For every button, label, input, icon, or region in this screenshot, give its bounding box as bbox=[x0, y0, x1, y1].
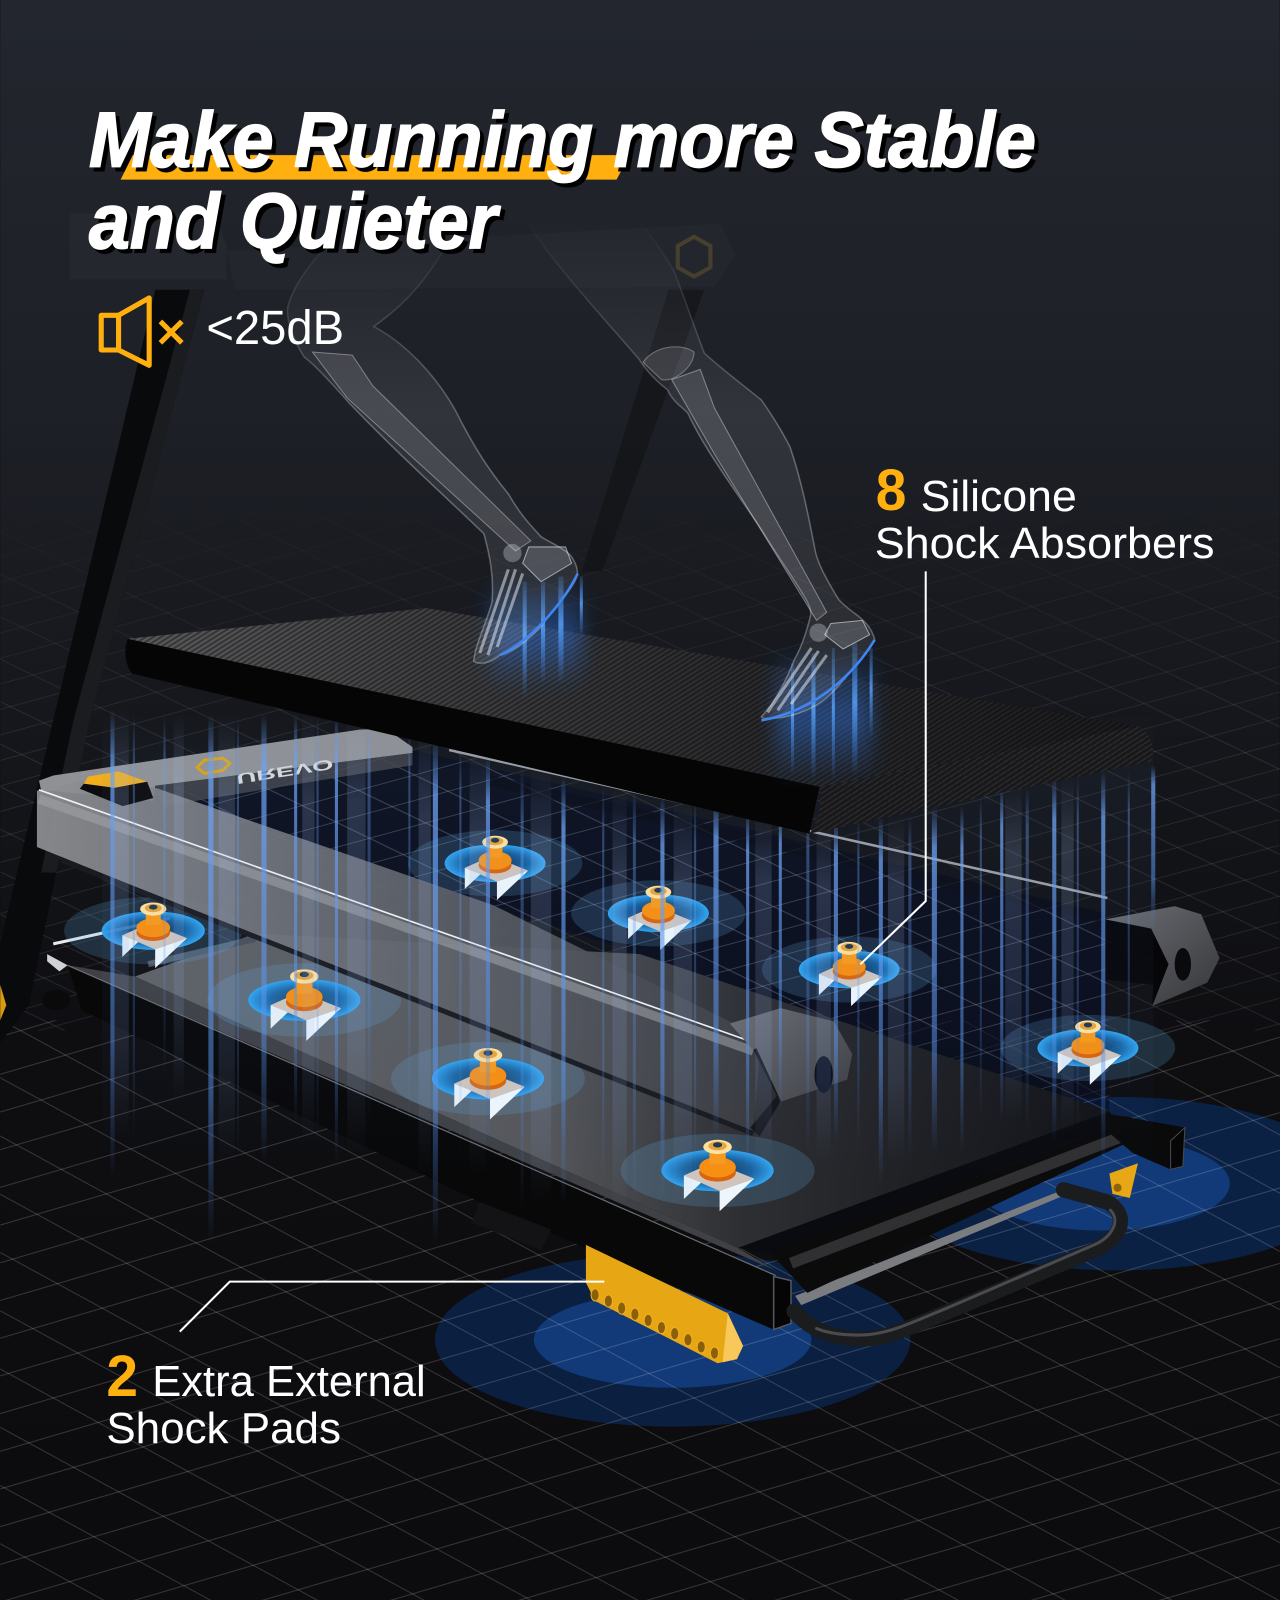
impact glow under feet bbox=[490, 577, 873, 781]
treadmill upright frame bbox=[0, 290, 704, 1043]
folding handle bbox=[794, 1190, 1120, 1339]
title bbox=[89, 97, 1036, 265]
callout: silicone shock absorbers bbox=[860, 458, 1214, 964]
base plate bbox=[135, 934, 1109, 1248]
right end bar bbox=[1097, 1113, 1185, 1169]
top plate of frame with logo: UREVO bbox=[235, 755, 334, 786]
near side rail bbox=[37, 781, 852, 1137]
far side rail bbox=[449, 750, 1220, 1006]
absorber 8 bbox=[1001, 1015, 1175, 1085]
shock pad ripples: rear bbox=[888, 1097, 1280, 1270]
absorber 7 bbox=[762, 936, 936, 1006]
absorber 3 bbox=[391, 1042, 585, 1119]
absorber 6 bbox=[571, 880, 746, 950]
absorber 4 bbox=[621, 1134, 814, 1211]
strip under roller bbox=[795, 1191, 1060, 1305]
callout: silicone shock absorbers: Silicone bbox=[921, 472, 1077, 521]
base plate side bar bbox=[68, 965, 791, 1330]
absorber 1 bbox=[64, 897, 242, 968]
grid seen through frame bbox=[155, 750, 1109, 1111]
shock pad ripples: front bbox=[435, 1253, 910, 1427]
title: Make Running more Stable bbox=[89, 97, 1036, 183]
yellow side button bbox=[80, 771, 153, 806]
noise level: <25dB bbox=[206, 302, 344, 355]
running belt deck bbox=[125, 608, 1153, 834]
left cross tube detail bbox=[47, 918, 255, 971]
cross roller bbox=[771, 1113, 1144, 1293]
callout: silicone shock absorbers: Shock Absorbers bbox=[875, 519, 1214, 568]
absorber 2 bbox=[207, 963, 401, 1041]
front shock pad bbox=[586, 1245, 743, 1363]
plate front lip bbox=[738, 1111, 1118, 1253]
floor grid near bbox=[0, 1020, 1280, 1600]
translucent inner frame area bbox=[155, 750, 1109, 1111]
callout: external shock pads bbox=[106, 1282, 604, 1453]
callout: external shock pads: Shock Pads bbox=[106, 1404, 341, 1453]
base plate front strip bbox=[68, 965, 776, 1270]
absorber 5 bbox=[408, 830, 582, 900]
rear shock pad bbox=[1109, 1163, 1138, 1198]
top plate of frame with logo bbox=[39, 729, 412, 806]
icon: muted speaker bbox=[101, 298, 182, 365]
x-ray leg: rear bbox=[288, 219, 578, 663]
title: and Quieter bbox=[89, 179, 501, 265]
treadmill console, faded bbox=[70, 213, 736, 290]
silicone shock absorbers bbox=[64, 830, 1175, 1211]
callout: external shock pads: Extra External bbox=[152, 1357, 426, 1406]
callout: silicone shock absorbers: 8 bbox=[876, 458, 906, 523]
vibration light beams bbox=[102, 709, 1155, 1245]
floor grid far bbox=[0, 545, 1280, 1030]
title highlight bar bbox=[121, 155, 630, 180]
callout: external shock pads: 2 bbox=[106, 1344, 138, 1409]
x-ray leg: front bbox=[521, 194, 875, 720]
